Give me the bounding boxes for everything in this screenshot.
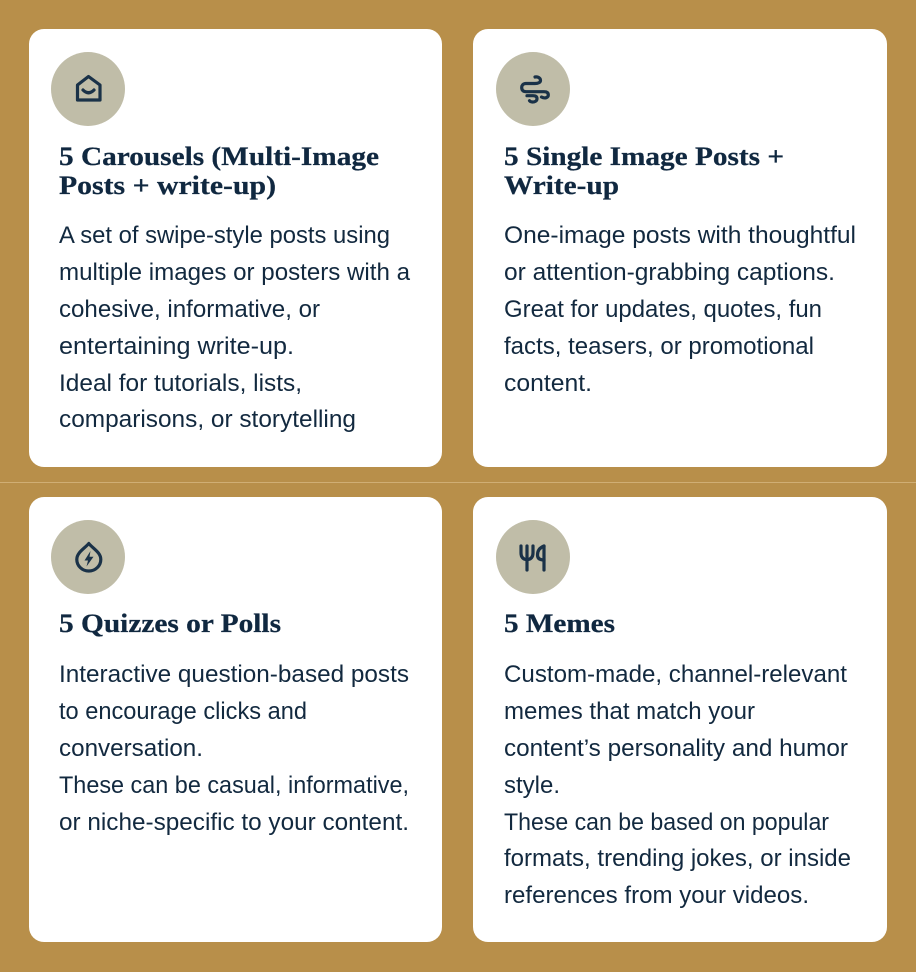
heading: carousels: Posts + write-up) (59, 171, 276, 200)
text block: quizzes description: conversation. (59, 735, 203, 762)
panel: quizzes or polls (29, 497, 442, 942)
heading: memes: 5 Memes (504, 609, 615, 638)
text block: memes description: Custom-made, channel-relevant (504, 661, 847, 688)
text block: quizzes description (59, 661, 409, 836)
heading: single image posts: Write-up (504, 171, 619, 200)
text block: memes description: formats, trending jokes, or inside (504, 845, 851, 872)
heading: single image posts (504, 142, 784, 200)
text block: single image description: or attention-grabbing captions. (504, 259, 835, 286)
text block: carousels description: Ideal for tutorials, lists, (59, 370, 302, 397)
text block: carousels description (59, 222, 411, 433)
text block: quizzes description: or niche-specific to your content. (59, 809, 409, 836)
text block: single image description: content. (504, 370, 592, 397)
text block: memes description: These can be based on popular (504, 809, 829, 836)
text block: memes description: references from your videos. (504, 882, 809, 909)
text block: carousels description: cohesive, informative, or (59, 296, 320, 323)
panel: carousels (29, 29, 442, 467)
panel: memes (473, 497, 887, 942)
heading: carousels: 5 Carousels (Multi-Image (59, 142, 379, 171)
heading: quizzes or polls: 5 Quizzes or Polls (59, 609, 281, 638)
text block: single image description: facts, teasers, or promotional (504, 333, 814, 360)
text block: memes description: memes that match your (504, 698, 755, 725)
text block: carousels description: multiple images or posters with a (59, 259, 411, 286)
text block: memes description: content’s personality and humor (504, 735, 848, 762)
panel: single image posts (473, 29, 887, 467)
icon: house with smile (51, 52, 125, 126)
text block: carousels description: entertaining write-up. (59, 333, 294, 360)
icon: drop with lightning bolt (51, 520, 125, 594)
text block: memes description: style. (504, 772, 560, 799)
text block: quizzes description: to encourage clicks and (59, 698, 307, 725)
text block: memes description (504, 661, 851, 909)
text block: single image description (504, 222, 856, 397)
text block: carousels description: comparisons, or storytelling (59, 406, 356, 433)
icon: fork and knife (496, 520, 570, 594)
heading: carousels (59, 142, 379, 200)
text block: quizzes description: Interactive question-based posts (59, 661, 409, 688)
text block: single image description: Great for updates, quotes, fun (504, 296, 822, 323)
icon: wind (496, 52, 570, 126)
text block: carousels description: A set of swipe-style posts using (59, 222, 390, 249)
text block: quizzes description: These can be casual, informative, (59, 772, 409, 799)
heading: single image posts: 5 Single Image Posts + (504, 142, 784, 171)
text block: single image description: One-image posts with thoughtful (504, 222, 856, 249)
